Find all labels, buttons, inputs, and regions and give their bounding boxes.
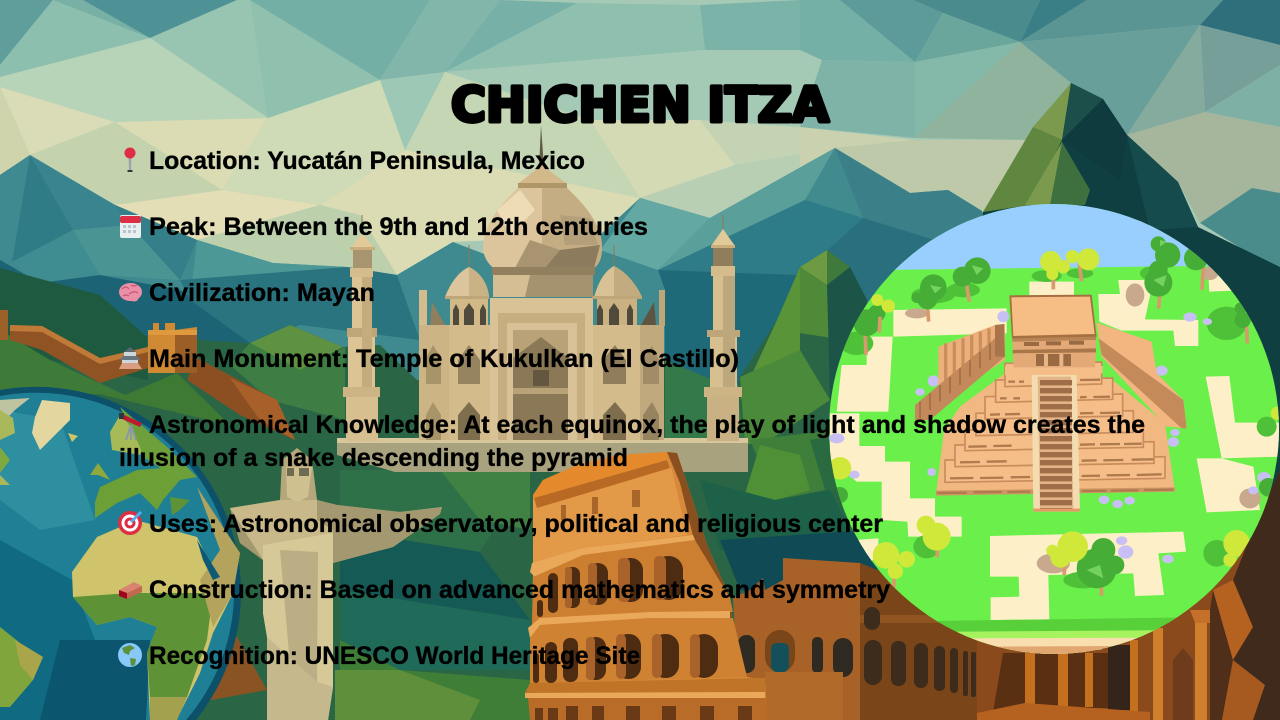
corner posts and buttresses bbox=[419, 290, 427, 326]
title: CHICHEN ITZA bbox=[451, 78, 829, 134]
illustration: Taj Mahal bbox=[337, 125, 748, 472]
icon: pagoda temple bbox=[119, 347, 142, 369]
illustration: Petra rock facade bbox=[977, 470, 1280, 720]
fact: astronomical knowledge: Astronomical Knowledge: At each equinox, the play of light and shadow creates the bbox=[149, 411, 1145, 439]
fact: peak: Peak: Between the 9th and 12th centuries bbox=[149, 213, 648, 241]
small domes bbox=[450, 298, 488, 325]
illustration: Christ the Redeemer bbox=[230, 448, 442, 720]
main dome bbox=[539, 125, 544, 168]
platform bbox=[337, 440, 748, 472]
icon: telescope bbox=[119, 413, 142, 440]
bottom ground bands bbox=[936, 618, 1177, 654]
fact: astronomical knowledge bbox=[119, 411, 1145, 472]
green trees bbox=[832, 236, 1278, 596]
fact: uses: Uses: Astronomical observatory, political and religious center bbox=[149, 510, 883, 538]
terrace slots bbox=[937, 380, 1173, 493]
icon: globe bbox=[118, 643, 142, 667]
fact: main monument: Main Monument: Temple of Kukulkan (El Castillo) bbox=[149, 345, 739, 373]
fact: construction: Construction: Based on advanced mathematics and symmetry bbox=[149, 576, 890, 604]
icon: brain bbox=[119, 283, 142, 302]
central staircase bbox=[1032, 375, 1080, 512]
cream paths bbox=[830, 275, 1280, 620]
back stair left bbox=[938, 324, 1005, 386]
illustration: Great Wall bbox=[0, 310, 295, 440]
background: dark peak on the right bbox=[960, 83, 1280, 620]
illustration: Colosseum bbox=[525, 452, 767, 720]
illustration: Colosseum ruin extension bbox=[733, 558, 977, 720]
picture: circular low-poly pyramid scene bbox=[820, 200, 1280, 660]
pyramid bbox=[915, 295, 1187, 512]
back stair right bbox=[1097, 323, 1187, 428]
icon: round pushpin bbox=[124, 148, 136, 172]
pebbles bbox=[829, 311, 1271, 563]
background: green hills bbox=[0, 250, 885, 720]
fact: astronomical knowledge: illusion of a snake descending the pyramid bbox=[119, 444, 628, 472]
illustration: globe bbox=[0, 387, 241, 720]
icon: bullseye target bbox=[118, 511, 142, 535]
fact: civilization: Civilization: Mayan bbox=[149, 279, 375, 307]
colosseum arches bbox=[533, 556, 718, 683]
terraces bbox=[936, 373, 1175, 495]
tree shadows bbox=[840, 267, 1277, 588]
yellow trees bbox=[829, 248, 1280, 587]
minaret left bbox=[343, 215, 380, 441]
fact: recognition: Recognition: UNESCO World Heritage Site bbox=[149, 642, 640, 670]
temple bbox=[1005, 366, 1103, 375]
fact: location: Location: Yucatán Peninsula, Mexico bbox=[149, 147, 585, 175]
icon: brick bbox=[119, 582, 142, 599]
background: teal mountains bbox=[0, 148, 1000, 400]
main building bbox=[419, 325, 664, 440]
icon: calendar bbox=[120, 215, 141, 238]
minaret right bbox=[704, 215, 742, 441]
